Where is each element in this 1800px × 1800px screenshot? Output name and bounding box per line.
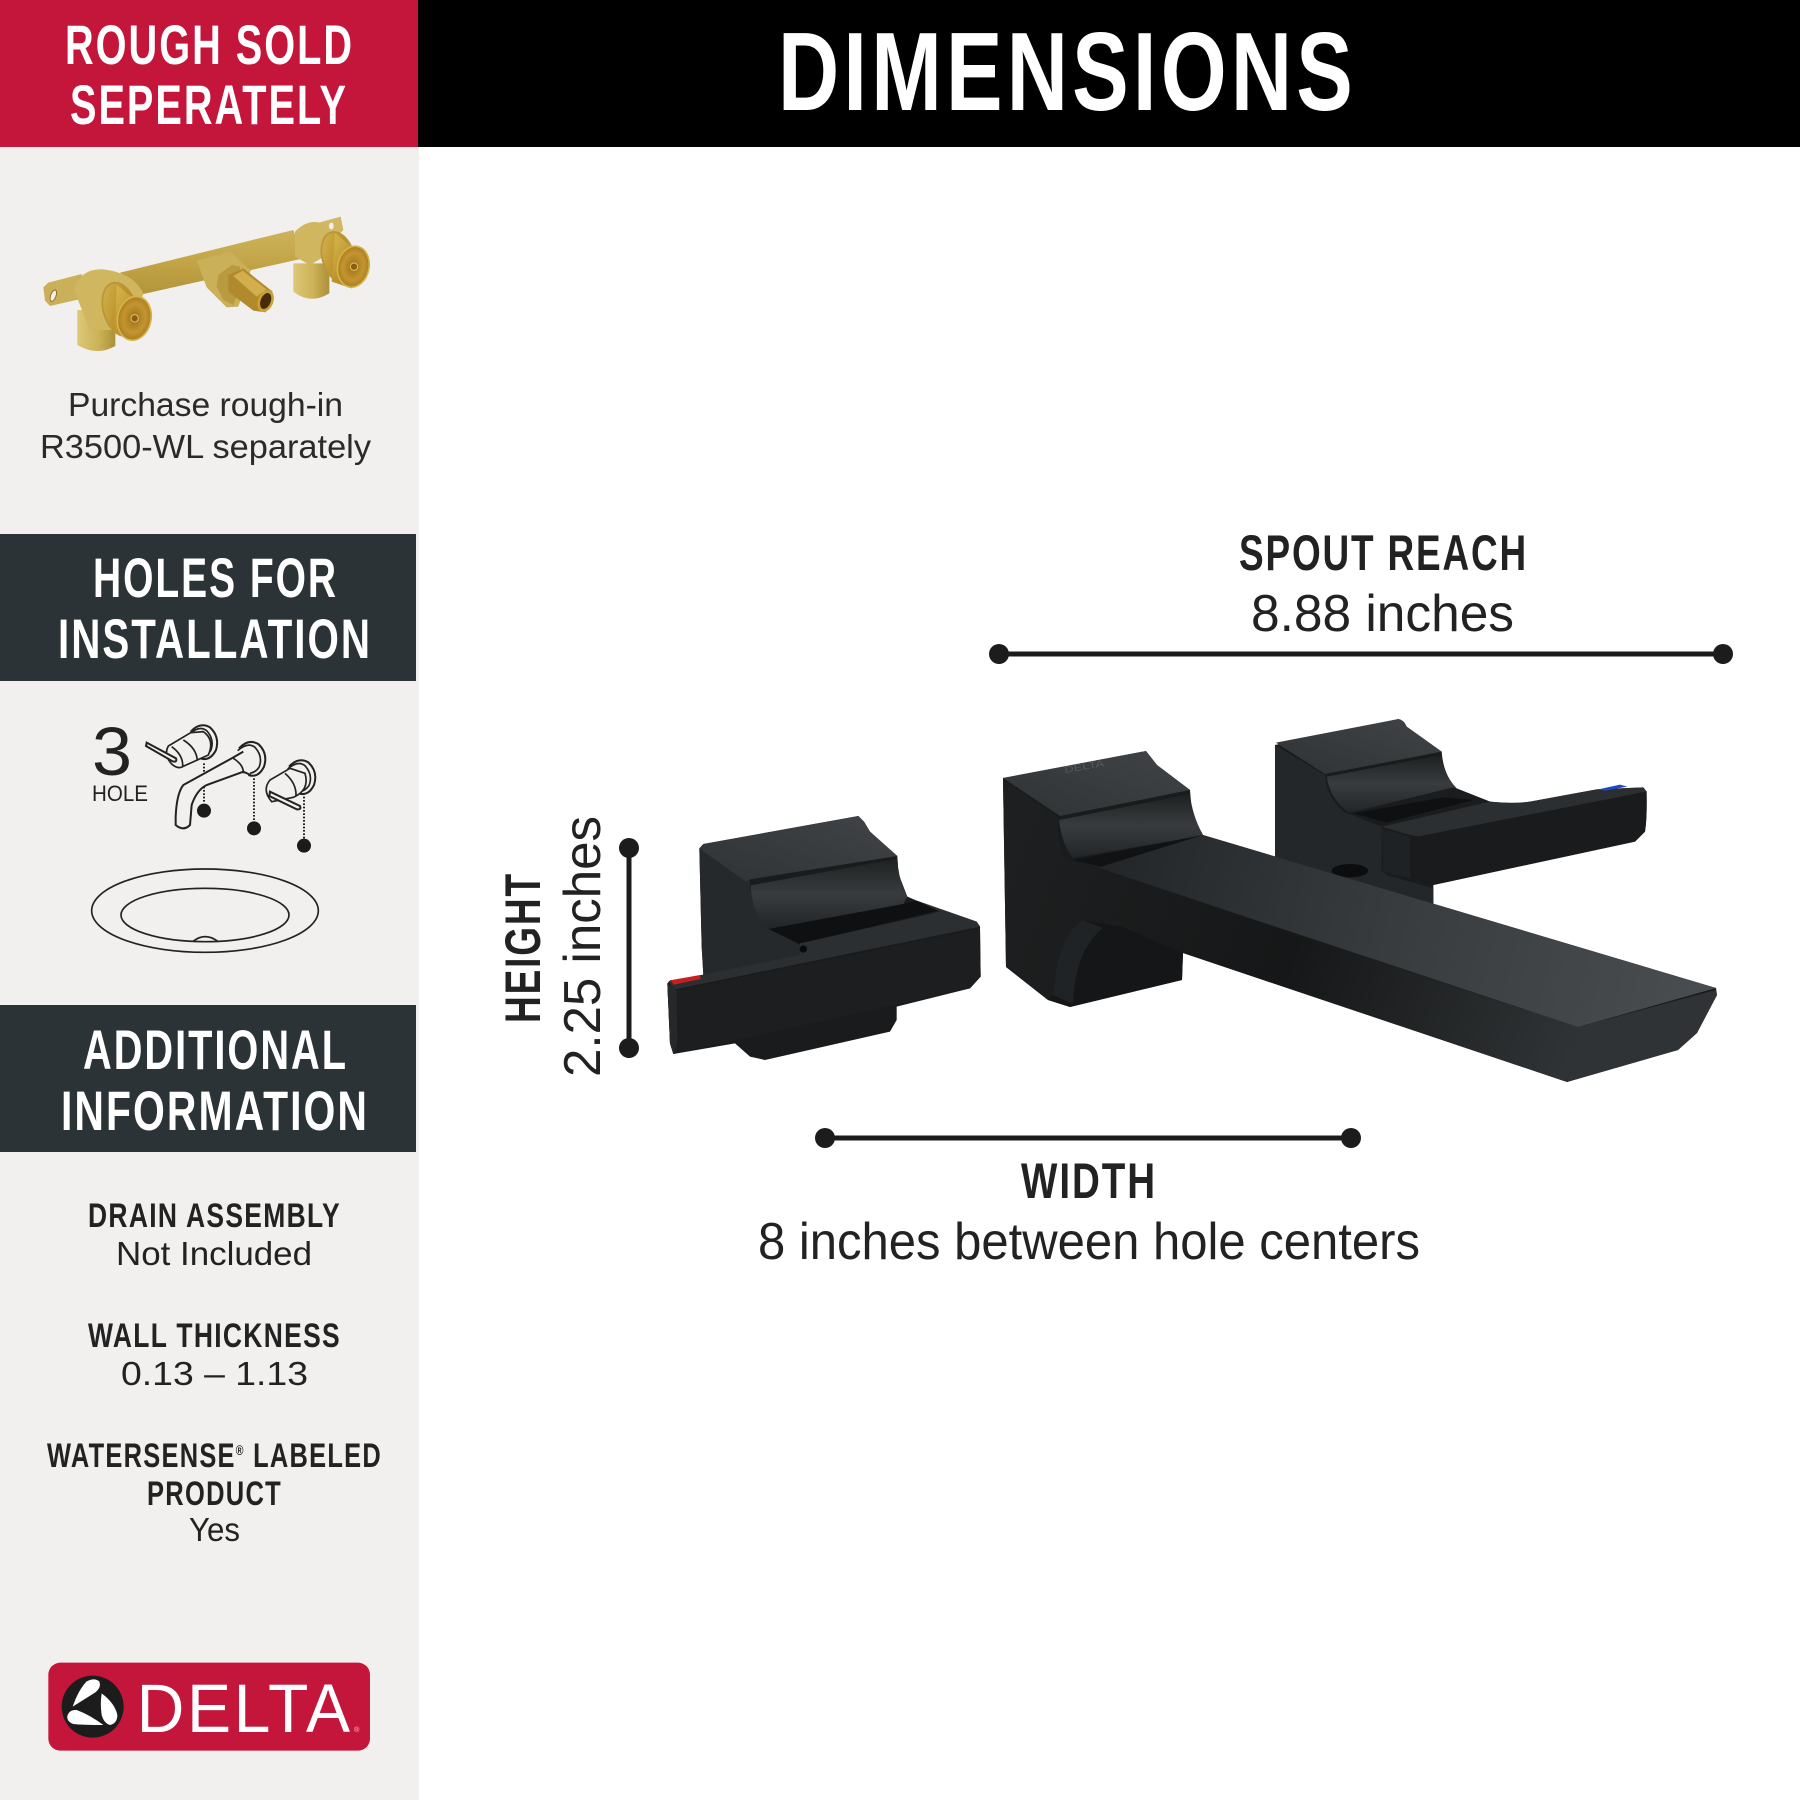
spout silhouette — [1003, 751, 1717, 1082]
banner: rough sold separately — [0, 0, 418, 147]
logo: delta — [48, 1663, 370, 1751]
banner: holes for installation — [0, 534, 416, 681]
text: purchase rough-in: R3500-WL separately — [40, 428, 372, 465]
icon: 3 hole count: HOLE — [92, 781, 148, 806]
dimension: width — [758, 1128, 1420, 1271]
text: purchase rough-in: Purchase rough-in — [68, 386, 343, 423]
dimension: spout reach: 8.88 inches — [1251, 585, 1514, 643]
illustration: left faucet handle — [667, 816, 981, 1060]
dimension: height — [495, 816, 639, 1077]
spec: drain assembly — [88, 1197, 341, 1272]
dimension: width: WIDTH — [1021, 1153, 1157, 1209]
spec: drain assembly: Not Included — [116, 1235, 312, 1272]
title: DIMENSIONS — [778, 10, 1357, 134]
logo: delta: DELTA — [137, 1670, 353, 1747]
heading: seperately: SEPERATELY — [70, 73, 348, 136]
banner: dimensions title — [418, 0, 1800, 147]
banner: additional information: ADDITIONAL — [83, 1018, 348, 1081]
dimension: width: 8 inches between hole centers — [758, 1213, 1420, 1271]
icon: brass rough-in valve — [43, 217, 373, 351]
spec: watersense: PRODUCT — [147, 1475, 282, 1513]
spec: wall thickness — [88, 1317, 341, 1392]
heading: rough sold: ROUGH SOLD — [65, 13, 354, 76]
banner: additional information — [0, 1005, 416, 1152]
banner: holes for installation: INSTALLATION — [58, 607, 372, 670]
banner: additional information: INFORMATION — [61, 1079, 369, 1142]
spec: watersense — [47, 1437, 382, 1548]
spec: watersense: Yes — [189, 1511, 240, 1548]
dimension: height: 2.25 inches — [554, 816, 612, 1077]
spec: watersense: WATERSENSE — [47, 1437, 300, 1475]
spec: watersense: ® — [236, 1442, 245, 1458]
text: purchase rough-in — [40, 386, 372, 465]
panel: left sidebar — [0, 0, 419, 1800]
spec: drain assembly: DRAIN ASSEMBLY — [88, 1197, 341, 1235]
logo: delta: ® — [354, 1725, 360, 1734]
spout embossed logo: DELTA — [1064, 758, 1105, 775]
icon: 3 hole count — [92, 713, 148, 806]
icon: wall-mount faucet and sink — [92, 725, 318, 952]
dimension: height: HEIGHT — [495, 872, 551, 1023]
banner: holes for installation: HOLES FOR — [93, 546, 338, 609]
icon: 3 hole count: 3 — [92, 713, 132, 790]
spec: watersense: LABELED — [245, 1437, 382, 1475]
dimension: spout reach — [989, 525, 1733, 664]
illustration: spout — [1003, 751, 1717, 1082]
spec: wall thickness: 0.13 – 1.13 — [121, 1355, 308, 1392]
dimension: spout reach: SPOUT REACH — [1239, 525, 1528, 581]
illustration: right faucet handle — [1275, 719, 1647, 913]
spec: wall thickness: WALL THICKNESS — [88, 1317, 341, 1355]
